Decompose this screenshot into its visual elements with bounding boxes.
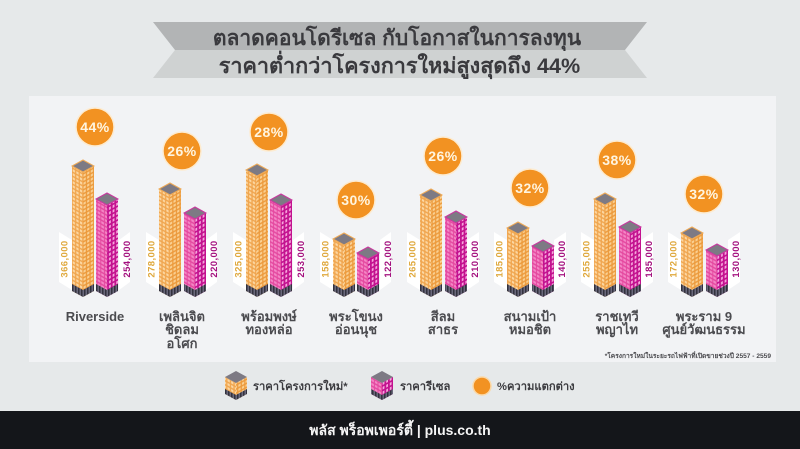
footer bar [0, 411, 800, 449]
group: Rama 9: 130,000 [731, 240, 742, 278]
group: Rama 9: 172,000 [668, 240, 680, 278]
group: Phloen Chit: 26% [167, 143, 197, 159]
group: Phrom Phong: 325,000 [234, 240, 244, 278]
group: Riverside: 254,000 [122, 240, 133, 278]
group: Phrom Phong: 253,000 [296, 240, 307, 278]
group: Silom: สีลม [431, 309, 455, 324]
group: Rama 9: ศูนย์วัฒนธรรม [662, 322, 746, 338]
group: Rama 9 [662, 175, 746, 338]
panel: chart area [29, 96, 776, 362]
group: Phrom Phong [233, 113, 307, 337]
group: Ratchathewi: 38% [602, 152, 632, 168]
group: Phloen Chit: 220,000 [209, 240, 220, 278]
group: Riverside: 44% [80, 119, 110, 135]
legend: resale price: ราคารีเซล [400, 380, 450, 393]
group: Silom: 265,000 [408, 240, 418, 278]
group: Sanam Pao: 140,000 [557, 240, 568, 278]
legend: new project price: ราคาโครงการใหม่* [253, 379, 348, 393]
group: Ratchathewi: 255,000 [582, 240, 592, 278]
footnote: *โครงการใหม่ในระยะรถไฟฟ้าที่เปิดขายช่วงปี 2557 - 2559 [605, 350, 771, 360]
group: Sanam Pao: 185,000 [494, 240, 506, 278]
group: Phrom Phong: 28% [254, 124, 284, 140]
title ribbon [153, 22, 647, 80]
group: Ratchathewi [581, 141, 655, 338]
legend: percent difference [473, 377, 575, 395]
group: Rama 9: พระราม 9 [676, 309, 732, 324]
group: Riverside: 366,000 [60, 240, 70, 278]
group: Silom: 210,000 [470, 240, 481, 278]
legend: new project price [225, 371, 348, 400]
group: Phloen Chit: อโศก [167, 335, 198, 351]
group: Silom [407, 137, 481, 337]
legend: resale price [371, 371, 450, 400]
legend: percent difference: %ความแตกต่าง [497, 381, 575, 393]
group: Sanam Pao: 32% [515, 180, 545, 196]
group: Phra Khanong: พระโขนง [329, 308, 383, 324]
group: Phloen Chit: เพลินจิต [159, 309, 205, 324]
group: Ratchathewi: 185,000 [644, 240, 655, 278]
group: Phra Khanong: อ่อนนุช [335, 322, 377, 338]
group: Sanam Pao: หมอชิต [509, 322, 551, 337]
group: Phrom Phong: พร้อมพงษ์ [241, 309, 297, 324]
group: Phra Khanong: 158,000 [320, 240, 332, 278]
title ribbon: ตลาดคอนโดรีเซล กับโอกาสในการลงทุน [213, 25, 582, 52]
group: Silom: 26% [428, 148, 458, 164]
group: Ratchathewi: ราชเทวี [595, 309, 639, 324]
group: Phloen Chit [146, 132, 220, 351]
group: Phra Khanong: 122,000 [383, 240, 394, 278]
group: Rama 9: 32% [689, 186, 719, 202]
group: Ratchathewi: พญาไท [596, 321, 638, 338]
footer bar: พลัส พร็อพเพอร์ตี้ | plus.co.th [309, 419, 491, 438]
group: Phrom Phong: ทองหล่อ [245, 322, 293, 337]
group: Phloen Chit: 278,000 [146, 240, 158, 278]
title ribbon: ราคาต่ำกว่าโครงการใหม่สูงสุดถึง 44% [219, 50, 580, 80]
group: Sanam Pao: สนามเป้า [504, 309, 556, 324]
group: Riverside: Riverside [66, 309, 124, 324]
group: Sanam Pao [494, 169, 568, 337]
group: Phra Khanong [320, 181, 394, 338]
group: Silom: สาธร [428, 322, 458, 337]
group: Riverside [59, 108, 133, 324]
group: Phra Khanong: 30% [341, 192, 371, 208]
group: Phloen Chit: ชิดลม [165, 322, 199, 337]
